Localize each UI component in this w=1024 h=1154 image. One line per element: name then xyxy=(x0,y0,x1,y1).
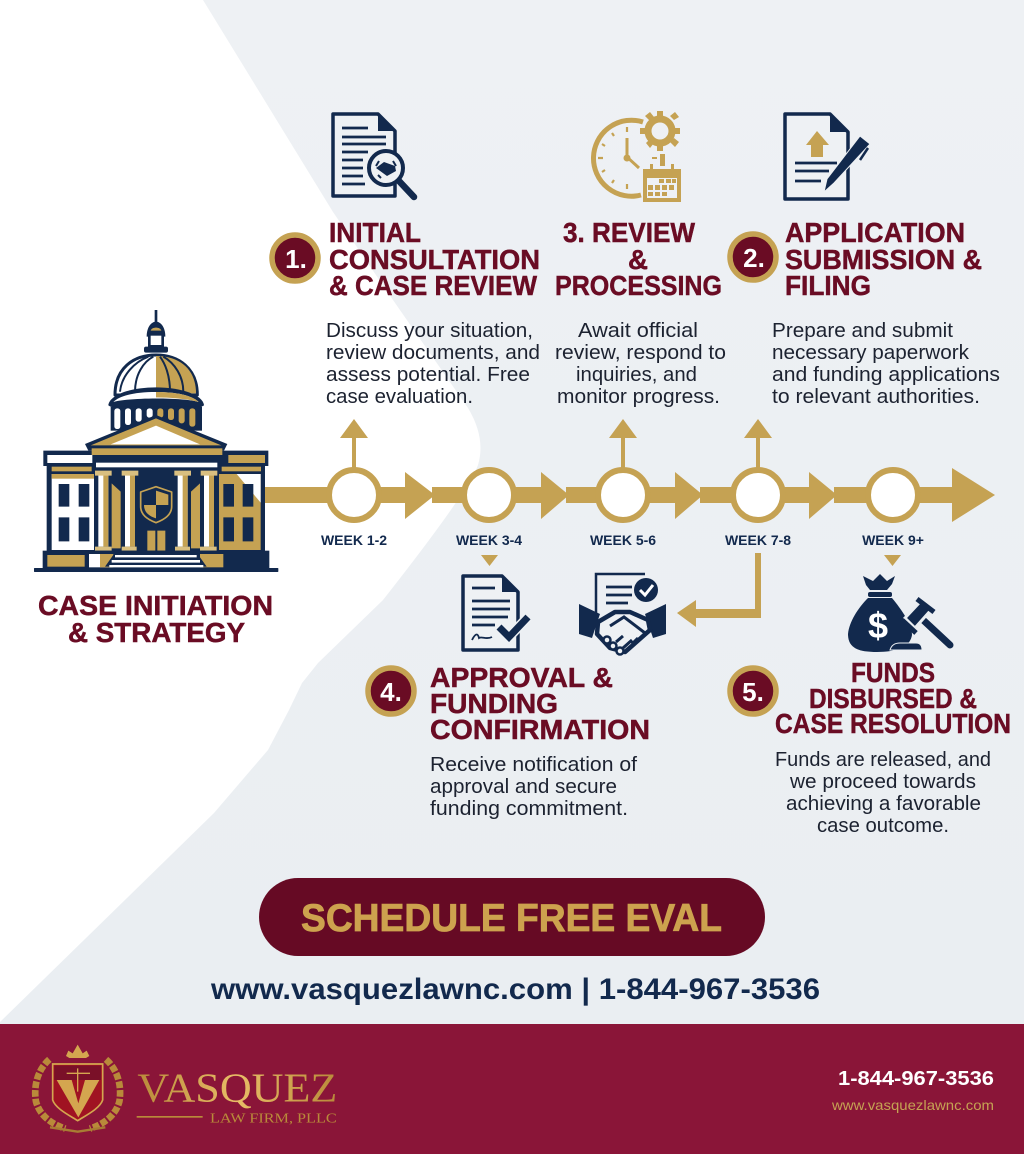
step 2: SUBMISSION & xyxy=(785,244,982,275)
icon: clock, gear and calendar xyxy=(593,111,681,202)
step 4: funding commitment. xyxy=(430,797,628,820)
step 5: DISBURSED & xyxy=(809,683,977,714)
badge 1 xyxy=(272,235,318,281)
step 5: Funds are released, and xyxy=(775,748,991,771)
step 1: Discuss your situation, xyxy=(326,319,533,342)
step 5: achieving a favorable xyxy=(786,792,981,815)
step 1: assess potential. Free xyxy=(326,363,530,386)
step 4 xyxy=(368,662,650,820)
connector arrows xyxy=(340,419,901,627)
firm logo xyxy=(35,1045,337,1132)
step 1: case evaluation. xyxy=(326,385,473,408)
heading: case initiation: & STRATEGY xyxy=(68,617,245,648)
building illustration xyxy=(34,310,278,572)
week labels: WEEK 5-6 xyxy=(590,532,656,548)
icon: document with pen xyxy=(785,114,870,199)
badge 5 xyxy=(730,668,776,714)
step 1 xyxy=(272,217,540,408)
step 3: 3. REVIEW xyxy=(563,217,696,248)
step 4: APPROVAL & xyxy=(430,662,613,693)
step 5: we proceed towards xyxy=(789,770,976,793)
step 5: FUNDS xyxy=(851,657,935,688)
heading: case initiation: CASE INITIATION xyxy=(38,590,273,621)
step 4: CONFIRMATION xyxy=(430,714,650,745)
footer phone: 1-844-967-3536 xyxy=(838,1068,994,1090)
step 2: necessary paperwork xyxy=(772,341,970,364)
timeline nodes xyxy=(329,470,918,520)
step 2: FILING xyxy=(785,270,871,301)
step 1: review documents, and xyxy=(326,341,540,364)
step 3: & xyxy=(628,244,648,275)
badge 2: 2. xyxy=(743,243,765,273)
call to action button: SCHEDULE FREE EVAL xyxy=(301,897,722,940)
badge 5: 5. xyxy=(742,677,764,707)
step 3: inquiries, and xyxy=(576,363,697,386)
icon: handshake with approved document xyxy=(579,574,666,654)
step 2: Prepare and submit xyxy=(772,319,953,342)
badge 1: 1. xyxy=(285,244,307,274)
step 3: monitor progress. xyxy=(557,385,720,408)
step 5 xyxy=(730,657,1011,837)
step 3 xyxy=(555,217,726,408)
icon: money bag and gavel xyxy=(848,574,950,652)
step 1: INITIAL xyxy=(329,217,421,248)
footer website: www.vasquezlawnc.com xyxy=(831,1097,994,1113)
step 2: to relevant authorities. xyxy=(772,385,980,408)
step 2: APPLICATION xyxy=(785,217,965,248)
badge 4: 4. xyxy=(380,677,402,707)
step 2 xyxy=(730,217,1000,408)
footer band xyxy=(0,1024,1024,1154)
step 1: & CASE REVIEW xyxy=(329,270,538,301)
firm logo: VASQUEZ xyxy=(137,1065,337,1111)
contact line: www.vasquezlawnc.com | 1-844-967-3536 xyxy=(210,973,820,1006)
week labels xyxy=(321,532,924,548)
badge 2 xyxy=(730,234,776,280)
step 4: FUNDING xyxy=(430,688,558,719)
call to action button xyxy=(259,878,765,956)
step 3: PROCESSING xyxy=(555,270,722,301)
week labels: WEEK 7-8 xyxy=(725,532,791,548)
heading: case initiation xyxy=(38,590,273,648)
firm logo: LAW FIRM, PLLC xyxy=(210,1111,337,1126)
icon: money bag and gavel: $ xyxy=(868,605,888,646)
step 2: and funding applications xyxy=(772,363,1000,386)
icon: signed document with check xyxy=(463,576,528,650)
week labels: WEEK 3-4 xyxy=(456,532,522,548)
step 5: case outcome. xyxy=(817,814,949,837)
step 1: CONSULTATION xyxy=(329,244,540,275)
step 3: Await official xyxy=(578,319,698,342)
week labels: WEEK 1-2 xyxy=(321,532,387,548)
badge 4 xyxy=(368,668,414,714)
step 3: review, respond to xyxy=(555,341,726,364)
step 4: Receive notification of xyxy=(430,753,637,776)
timeline arrow xyxy=(265,468,995,522)
icon: document with magnifier xyxy=(333,114,414,197)
week labels: WEEK 9+ xyxy=(862,532,924,548)
step 4: approval and secure xyxy=(430,775,617,798)
